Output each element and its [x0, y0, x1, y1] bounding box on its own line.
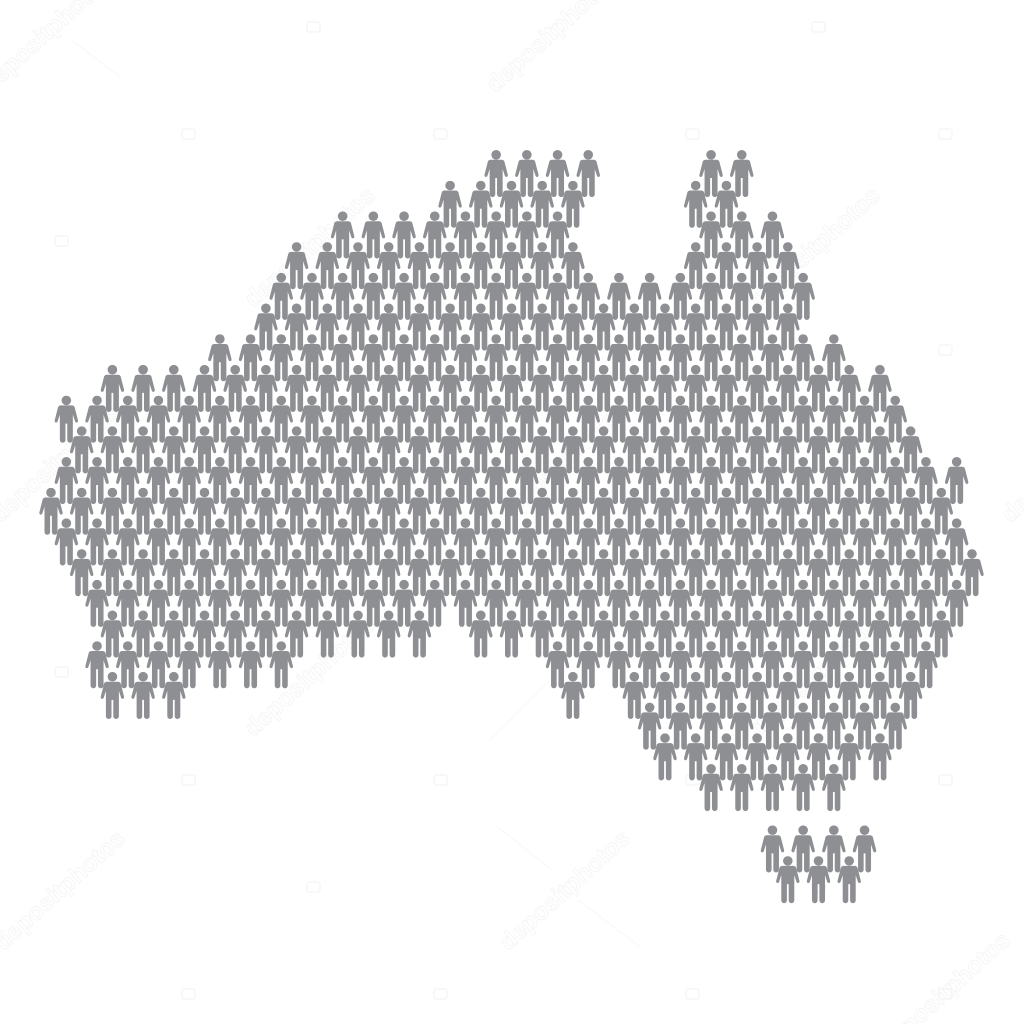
- people row 12: [39, 488, 953, 535]
- people row: Top End: [484, 150, 600, 198]
- people row 13: [54, 518, 968, 566]
- people row: Cape York 2: [684, 180, 738, 228]
- people row 7: [208, 334, 846, 382]
- people row 6: [254, 304, 800, 351]
- people row 16: east: [469, 610, 953, 658]
- people row 10: [70, 426, 922, 474]
- map: mainland Australia made of people: [39, 150, 1024, 811]
- people row: Cape York 4: [684, 242, 800, 290]
- watermark layer: depositphotos: [239, 611, 381, 742]
- people row 8: [100, 365, 892, 412]
- watermark layer: depositphotos: [494, 825, 636, 956]
- people row 20: [653, 733, 892, 780]
- people row 21: [699, 764, 846, 812]
- watermark layer: depositphotos: [744, 182, 886, 313]
- watermark layer: depositphotos: [491, 397, 633, 528]
- people row 5: [270, 272, 815, 320]
- people row 19: [638, 702, 907, 750]
- people row 9: [54, 396, 907, 443]
- watermark layer: depositphotos: [744, 611, 886, 742]
- people row 17: east: [546, 641, 938, 688]
- people row 17: west: [85, 641, 293, 688]
- people row: north coast 4: [284, 242, 585, 290]
- people row 11: [54, 457, 968, 504]
- people row 18: southeast: [622, 672, 922, 719]
- people row 18: southwest tip: [100, 672, 186, 719]
- people row 15: [85, 580, 968, 627]
- people row: Cape York tip: [699, 150, 754, 198]
- people row: Cape York 3: [699, 212, 784, 258]
- map: Tasmania made of people: [39, 825, 1024, 903]
- person: Spencer Gulf tip: [561, 672, 585, 719]
- watermark layer: depositphotos: [239, 182, 381, 313]
- people row: north coast 3: [331, 212, 570, 258]
- Tasmania row 2: [776, 856, 861, 904]
- Tasmania row 1: [760, 826, 876, 872]
- people row 14: [70, 549, 984, 596]
- people row: Top End 2: [438, 180, 585, 228]
- people row 16: west: [100, 610, 432, 658]
